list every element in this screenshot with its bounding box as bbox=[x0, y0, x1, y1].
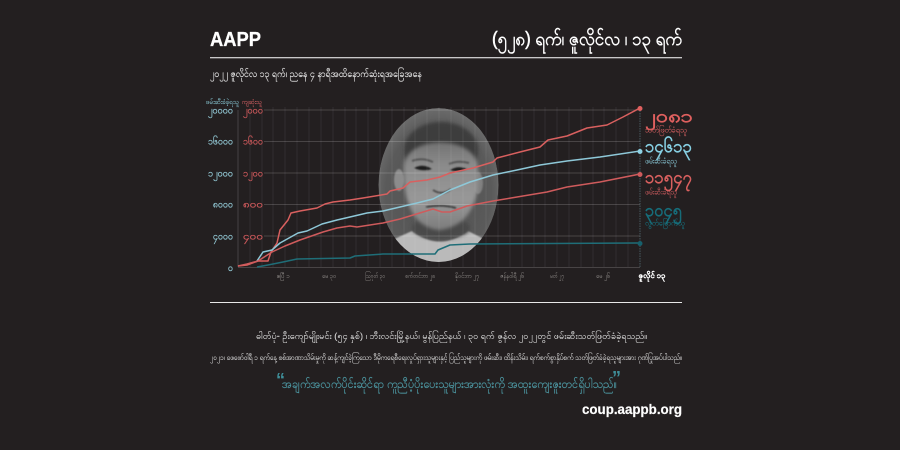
stat: released: လွတ်မြောက်သူ bbox=[645, 218, 685, 230]
caption: dedication: ၂၀၂၁၊ ဖေဖော်ဝါရီ ၁ ရက်နေ့ စစ်အာဏာသိမ်းမှုကို ဆန့်ကျင်ခဲ့ကြသော ဒီမိုကရေစီရေးလှုပ်ရှားသူများနှင့် ပြည်သူများကို ဖမ်းဆီး၊ ထိန်းသိမ်း၊ ရက်စက်စွာနှိပ်စက် သတ်ဖြတ်ခံခဲ့ရသူများအား ဂုဏ်ပြုအပ်ပါသည်။ bbox=[210, 352, 682, 364]
left axis labels: ၁၂၀၀၀ bbox=[208, 168, 233, 182]
line: arrested, dark red bbox=[238, 174, 640, 266]
left axis labels bbox=[208, 106, 233, 274]
right axis labels: ၂၀၀၀ bbox=[243, 106, 263, 118]
stat: killed: သတ်ဖြတ်ခံရသူ bbox=[645, 124, 687, 136]
x-axis date labels: ဧပြီ ၁ bbox=[276, 271, 290, 281]
quote: thanks: ” bbox=[612, 368, 621, 388]
x-axis date labels: စက်တင်ဘာ ၂၈ bbox=[405, 272, 435, 281]
subtitle: ၂၀၂၂ ဇူလိုင်လ ၁၃ ရက်၊ ညနေ ၄ နာရီအထိနောက်ဆုံးရအခြေအနေ bbox=[210, 66, 422, 82]
left axis labels: ၁၆၀၀၀ bbox=[208, 134, 233, 148]
quote: thanks: “ bbox=[276, 370, 285, 390]
quote: thanks bbox=[276, 368, 621, 394]
right axis labels: ၄၀၀ bbox=[243, 232, 263, 244]
right axis labels: ၁၂၀၀ bbox=[243, 168, 263, 182]
stat: detained: ဖမ်းဆီးခံရသူ bbox=[645, 186, 677, 198]
x-axis date labels: မေ ၂၆ bbox=[596, 272, 610, 281]
stat: killed bbox=[645, 106, 693, 136]
line: dead, top red bbox=[238, 108, 640, 266]
portrait photo bbox=[378, 108, 498, 265]
left axis labels: ၄၀၀၀ bbox=[213, 232, 233, 244]
left axis labels: ၂၀၀၀၀ bbox=[208, 106, 233, 118]
current date label: ဇူလိုင် ၁၃ bbox=[638, 270, 666, 283]
title: day count and date: (၅၂၈) ရက်၊ ဇူလိုင်လ ၊ ၁၃ ရက် bbox=[492, 27, 682, 54]
line chart: ကျဆုံးသူ bbox=[242, 99, 262, 107]
x-axis date labels bbox=[276, 271, 610, 281]
stat: arrested: ဖမ်းဆီးခံရသူ bbox=[645, 156, 677, 168]
stat: detained: ၁၁၅၄၇ bbox=[645, 167, 692, 191]
website url: coup.aappb.org bbox=[582, 401, 682, 417]
stat: killed: ၂၀၈၁ bbox=[645, 106, 693, 130]
stat: arrested bbox=[645, 136, 692, 168]
quote: thanks: အချက်အလက်ပိုင်းဆိုင်ရာ ကူညီပံ့ပိုးပေးသူများအားလုံးကို အထူးကျေးဇူးတင်ရှိပါသည်။ bbox=[282, 376, 617, 394]
line: detained, light blue bbox=[257, 151, 640, 261]
end markers bbox=[638, 106, 642, 111]
x-axis date labels: မေ ၃၀ bbox=[322, 273, 336, 281]
line chart bbox=[206, 98, 666, 283]
stat: arrested: ၁၄၆၁၃ bbox=[645, 136, 692, 160]
right axis labels bbox=[243, 106, 263, 244]
x-axis date labels: ဇန်နဝါရီ ၂၆ bbox=[500, 272, 524, 281]
stat: detained bbox=[645, 167, 692, 198]
right axis labels: ၈၀၀ bbox=[243, 200, 263, 210]
left axis labels: ၈၀၀၀ bbox=[213, 200, 233, 210]
x-axis date labels: ဩဂုတ် ၃၀ bbox=[365, 271, 385, 281]
left axis labels: ၀ bbox=[228, 263, 233, 274]
line: released, teal bbox=[257, 243, 640, 267]
axis titles: ဖမ်းဆီးခံခဲ့ရသူ bbox=[206, 98, 239, 107]
stat: released: ၃၀၄၅ bbox=[645, 200, 682, 224]
right axis labels: ၁၆၀၀ bbox=[243, 134, 263, 148]
caption: photo credit: ဓါတ်ပုံ- ဦးကျော်မျိုးမင်း (၅၄ နှစ်) ၊ ဘီးလင်းမြို့နယ်၊ မွန်ပြည်နယ် ၊ ၃၀ ရက် ဇွန်လ ၂၀၂၂တွင် ဖမ်းဆီးသတ်ဖြတ်ခံခဲ့ရသည်။ bbox=[256, 330, 647, 343]
logo: AAPP: AAPP bbox=[210, 29, 261, 51]
x-axis date labels: မတ် ၂၇ bbox=[550, 272, 564, 281]
x-axis date labels: နိုဝင်ဘာ ၂၇ bbox=[455, 272, 479, 281]
stat: released bbox=[645, 200, 685, 230]
grid bbox=[250, 107, 628, 267]
